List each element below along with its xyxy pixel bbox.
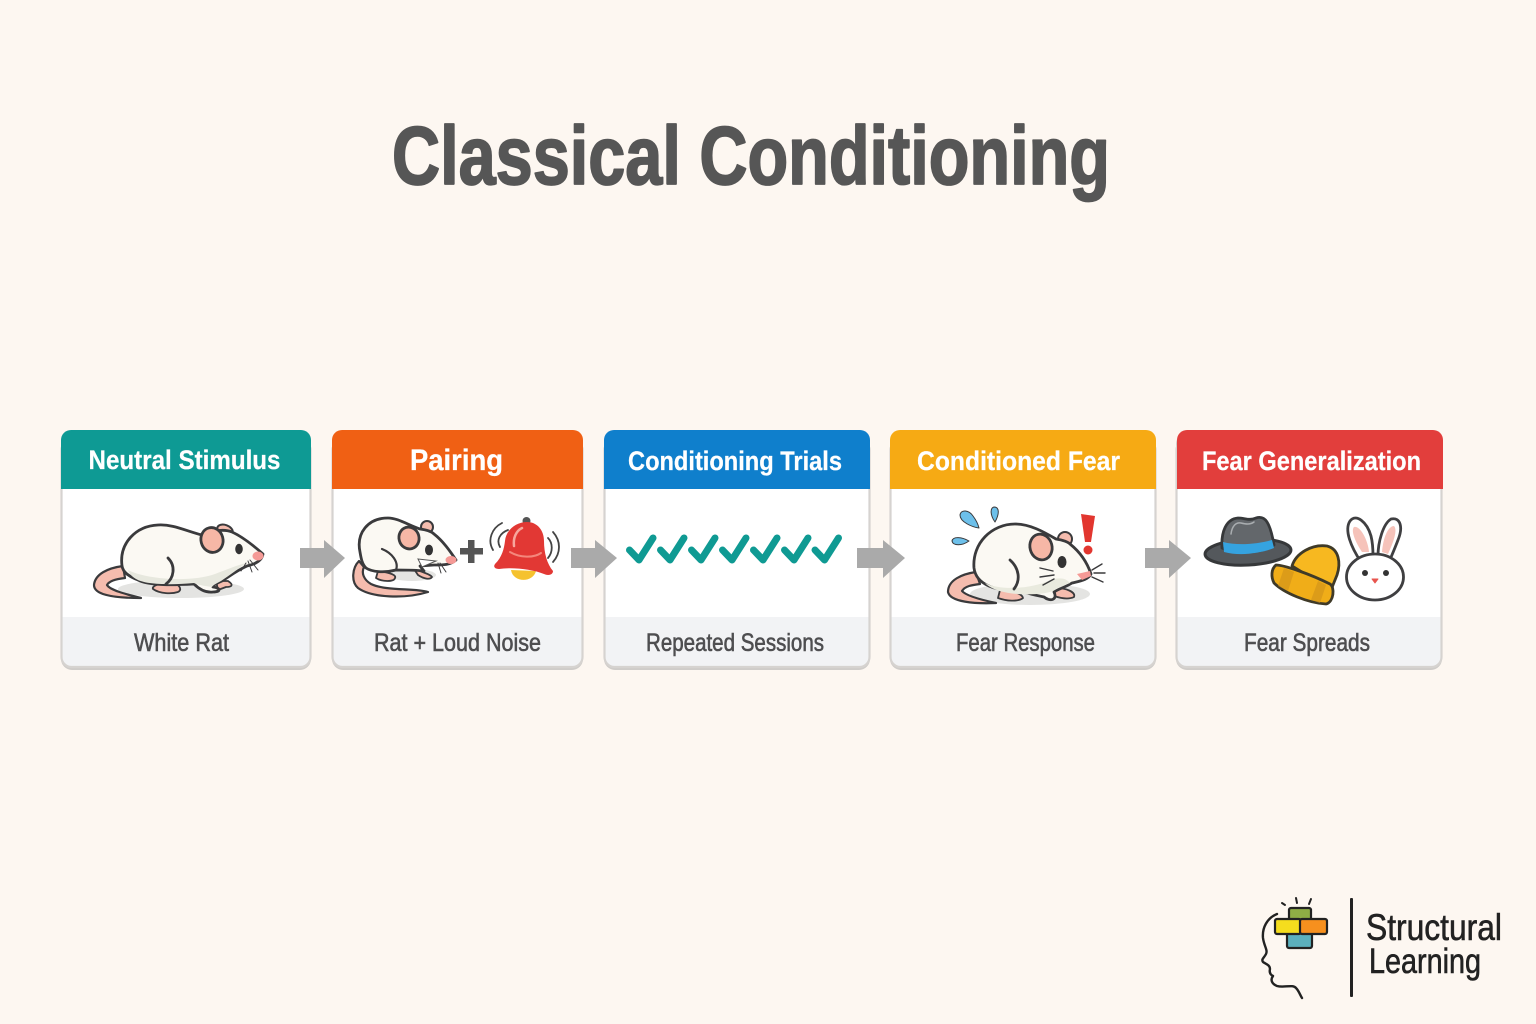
icon: exclamation mark xyxy=(1081,514,1095,554)
header: fear generalization xyxy=(1177,430,1443,489)
header: neutral stimulus: Neutral Stimulus xyxy=(88,445,280,475)
caption: fear spreads: Fear Spreads xyxy=(1244,629,1370,657)
caption: rat + loud noise: Rat + Loud Noise xyxy=(374,629,541,657)
icon: seven check marks xyxy=(630,538,838,560)
icon: rat xyxy=(353,518,456,597)
header: fear generalization: Fear Generalization xyxy=(1202,446,1421,476)
header: conditioning trials: Conditioning Trials xyxy=(628,446,842,476)
panel: fear generalization xyxy=(1176,430,1443,670)
arrow 3 xyxy=(857,540,905,578)
header: pairing: Pairing xyxy=(410,444,503,477)
icon: sweat drops xyxy=(952,507,998,545)
panel: neutral stimulus xyxy=(61,430,311,670)
icon: head with blocks xyxy=(1262,898,1327,998)
arrow 2 xyxy=(571,540,617,578)
header: neutral stimulus xyxy=(61,430,311,489)
icon: white rabbit xyxy=(1346,518,1404,600)
caption: white rat: White Rat xyxy=(134,629,229,657)
header: conditioned fear xyxy=(890,430,1156,489)
panel: pairing xyxy=(332,430,583,670)
logo: structural learning: Learning xyxy=(1369,942,1481,981)
divider xyxy=(1350,898,1353,997)
icon: plus xyxy=(460,540,483,563)
header: conditioned fear: Conditioned Fear xyxy=(917,446,1120,476)
icon: ringing bell xyxy=(490,517,559,580)
logo: structural learning xyxy=(1262,898,1502,998)
title: Classical Conditioning xyxy=(392,109,1110,202)
icon: frightened rat xyxy=(948,507,1105,605)
arrow 1 xyxy=(300,540,345,578)
panel: conditioned fear xyxy=(890,430,1156,670)
panel: conditioning trials xyxy=(604,430,870,670)
caption: fear response: Fear Response xyxy=(956,629,1095,657)
logo text: Structural xyxy=(1366,907,1502,948)
icon: white rat xyxy=(94,523,264,598)
icon: yellow beanie xyxy=(1272,546,1339,604)
header: pairing xyxy=(332,430,583,489)
header: conditioning trials xyxy=(604,430,870,489)
icon: grey hat xyxy=(1204,517,1292,567)
caption: repeated sessions: Repeated Sessions xyxy=(646,629,824,657)
arrow 4 xyxy=(1145,540,1191,578)
